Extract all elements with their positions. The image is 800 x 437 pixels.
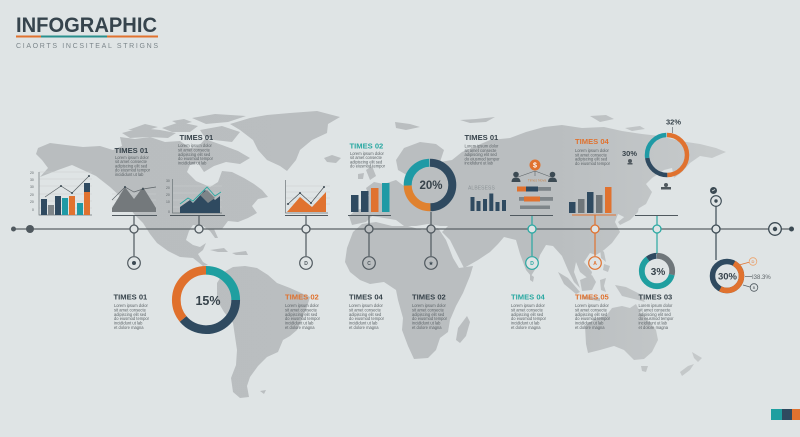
- text block: bottom Times 04: adipiscing elit sed: [349, 312, 382, 317]
- icon: small map marker: [661, 183, 671, 190]
- chart: mixed bars and line: 30: [30, 185, 34, 189]
- text block: bottom Times 01: incididunt ut lab: [114, 321, 143, 326]
- donut: 32%: [647, 135, 687, 175]
- marker D teal: D: [530, 261, 534, 267]
- chart: mixed bars and line: 20: [30, 200, 34, 204]
- text block: Times 01 A: Lorem ipsum dolor: [115, 155, 150, 160]
- text block: bottom Times 04: do eiusmod tempor: [349, 316, 385, 321]
- text block: bottom Times 04: [349, 292, 385, 330]
- text block: bottom Times 04: incididunt ut lab: [349, 321, 378, 326]
- chart: five bars orange: [569, 187, 616, 215]
- marker A orange: A: [593, 261, 597, 267]
- text block: bottom Times 04 teal: [511, 292, 547, 330]
- donut: 30%: [712, 262, 742, 290]
- text block: bottom Times 05 orange: Lorem ipsum dolor: [575, 303, 610, 308]
- title underline: [16, 36, 158, 38]
- donut label: 3%: 3%: [651, 267, 665, 278]
- text block: bottom Times 04: sit amet consecte: [349, 307, 382, 312]
- timeline: [11, 206, 794, 260]
- text block: bottom Times 04 teal: Lorem ipsum dolor: [511, 303, 546, 308]
- text block: bottom Times 04 teal: incididunt ut lab: [511, 321, 540, 326]
- text block: Times 01 B: do eiusmod tempor: [178, 156, 214, 161]
- text block: Times 01 B: TIMES 01: [180, 133, 214, 142]
- Borneo: [580, 275, 596, 291]
- Caribbean: [210, 248, 248, 255]
- North America: [36, 137, 268, 266]
- text block: bottom Times 03: do eiusmod tempor: [638, 316, 674, 321]
- text block: bottom Times 03: sit amet consecte: [638, 307, 671, 312]
- Sumatra and Java: [558, 272, 600, 301]
- text block: bottom Times 05 orange: et dolore magna: [575, 325, 605, 330]
- text block: bottom Times 02: et dolore magna: [412, 325, 442, 330]
- text block: bottom Times 05 orange: [575, 292, 611, 330]
- text block: bottom Times 02: TIMES 02: [412, 292, 446, 302]
- timeline axis: [13, 228, 791, 230]
- text block: bottom Times 01: sit amet consecte: [114, 307, 147, 312]
- text block: bottom Times 04 teal: sit amet consecte: [511, 307, 544, 312]
- text block: bottom Times 02: adipiscing elit sed: [412, 312, 445, 317]
- Australia: [585, 304, 658, 360]
- Britain and Scandinavia islands: [358, 117, 495, 180]
- text block: bottom Times 05 orange: adipiscing elit sed: [575, 312, 608, 317]
- label: 32%: 32%: [666, 118, 681, 126]
- icon: person left: [512, 172, 520, 182]
- text block: bottom Times 03: adipiscing elit sed: [638, 312, 672, 317]
- corner colour bar: [771, 409, 800, 420]
- text block: Times 01 A: incididunt ut lab: [115, 172, 144, 177]
- text block: Times 04 orange: sit amet consecte: [575, 152, 608, 157]
- text block: Times 01 A: sit amet consecte: [115, 159, 148, 164]
- text block: Times 01 A: TIMES 01: [114, 146, 149, 155]
- text block: bottom Times 02: incididunt ut lab: [412, 321, 441, 326]
- text block: Times 01 B: sit amet consecte: [178, 147, 211, 152]
- text block: bottom Times 04 teal: adipiscing elit sed: [511, 312, 544, 317]
- title: INFOGRAPHIC: [16, 14, 157, 37]
- Africa: [345, 222, 473, 359]
- chart: mixed bars and line: [30, 171, 92, 215]
- text block: Times 01 C: adipiscing elit sed: [464, 152, 498, 157]
- chart: mixed bars and line: 20: [30, 193, 34, 197]
- donut callouts: D: [752, 259, 755, 264]
- marker A orange: [589, 257, 601, 269]
- Arctic Russia islands: [590, 115, 645, 131]
- Iceland: [324, 155, 341, 163]
- chart: navy mountain: 30: [166, 179, 170, 183]
- text block: Times 02 teal: Lorem ipsum dolor: [350, 151, 385, 156]
- donut callouts: I38.3%: [752, 275, 771, 281]
- marker D teal: [526, 257, 538, 269]
- text block: bottom Times 01: TIMES 01: [114, 292, 148, 302]
- timeline stems: [134, 206, 716, 260]
- text block: bottom Times 02: sit amet consecte: [412, 307, 445, 312]
- text block: bottom Times 03: incididunt ut lab: [638, 321, 668, 326]
- text block: bottom Times 02 orange: et dolore magna: [285, 325, 315, 330]
- text block: bottom Times 02: do eiusmod tempor: [412, 316, 448, 321]
- text block: Times 01 C: [464, 133, 500, 166]
- text block: Times 01 C: do eiusmod tempor: [464, 156, 500, 161]
- text block: Times 04 orange: adipiscing elit sed: [575, 157, 608, 162]
- text block: Times 02 teal: adipiscing elit sed: [350, 159, 383, 164]
- text block: Times 04 orange: do eiusmod tempor: [575, 161, 611, 166]
- text block: bottom Times 03: TIMES 03: [638, 292, 672, 302]
- text block: Times 04 orange: Lorem ipsum dolor: [575, 148, 610, 153]
- text block: bottom Times 02 orange: adipiscing elit sed: [285, 312, 318, 317]
- lower markers: [128, 257, 601, 269]
- text block: Times 01 C: TIMES 01: [464, 133, 499, 142]
- subtitle: CIAORTS INCSITEAL STRIGNS: [16, 43, 158, 50]
- marker 1: [128, 257, 140, 269]
- text block: Times 01 B: [178, 133, 214, 166]
- text block: bottom Times 03: [638, 292, 674, 330]
- Greenland: [230, 111, 340, 171]
- text block: Times 04 orange: TIMES 04: [575, 137, 610, 146]
- upper right marker: [710, 187, 721, 206]
- chart: people and horizontal bars: Times Nova: [528, 178, 546, 182]
- marker C: [363, 257, 375, 269]
- text block: bottom Times 01: adipiscing elit sed: [114, 312, 147, 317]
- marker star: [425, 257, 437, 269]
- text block: bottom Times 04 teal: TIMES 04: [511, 292, 546, 302]
- timeline nodes: [130, 223, 781, 235]
- donut label: 30%: 30%: [718, 272, 738, 282]
- chart: orange area: [285, 180, 330, 216]
- text block: bottom Times 03: et dolore magna: [638, 325, 669, 330]
- South America: [217, 266, 310, 398]
- New Guinea: [615, 285, 645, 302]
- chart: navy mountain: 0: [168, 210, 170, 214]
- text block: bottom Times 05 orange: do eiusmod tempor: [575, 316, 611, 321]
- text block: bottom Times 02 orange: Lorem ipsum dolor: [285, 303, 320, 308]
- text block: bottom Times 02: [412, 292, 448, 330]
- Tasmania: [641, 366, 648, 372]
- chart: small navy bars: ALBESESS: [468, 186, 495, 192]
- text block: Times 02 teal: TIMES 02: [350, 142, 383, 150]
- text block: bottom Times 01: et dolore magna: [114, 325, 144, 330]
- text block: bottom Times 05 orange: sit amet consecte: [575, 307, 608, 312]
- New Zealand: [680, 352, 702, 376]
- text block: Times 01 C: sit amet consecte: [464, 148, 497, 153]
- label: 30% with icon: [622, 149, 637, 164]
- chart: navy mountain: 20: [166, 193, 170, 197]
- text block: bottom Times 04: TIMES 04: [349, 292, 384, 302]
- text block: Times 01 A: adipiscing elit sed: [115, 163, 148, 168]
- Sri Lanka: [530, 274, 534, 282]
- text block: Times 02 teal: sit amet consecte: [350, 155, 383, 160]
- Arctic islands: [122, 114, 246, 142]
- Madagascar: [456, 316, 470, 343]
- text block: Times 01 A: [114, 146, 151, 177]
- divider: teal node cap: [635, 214, 678, 216]
- text block: Times 01 A: do eiusmod tempor: [115, 168, 151, 173]
- text block: bottom Times 01: [114, 292, 150, 330]
- text block: Times 02 teal: [350, 142, 386, 169]
- chart: mixed bars and line: 30: [30, 178, 34, 182]
- donut: 3%: [642, 256, 672, 286]
- donut: 20%: [408, 163, 452, 207]
- text block: Times 01 B: Lorem ipsum dolor: [178, 143, 213, 148]
- Japan: [618, 183, 644, 225]
- text block: bottom Times 02 orange: sit amet consecte: [285, 307, 318, 312]
- Eurasia: [349, 125, 726, 288]
- donut: 15%: [176, 270, 236, 330]
- donut label: 15%: 15%: [195, 294, 221, 308]
- text block: bottom Times 01: Lorem ipsum dolor: [114, 303, 149, 308]
- text block: bottom Times 04: et dolore magna: [349, 325, 379, 330]
- chart: mixed bars and line: 20: [30, 171, 34, 175]
- label: 30% with icon: 30%: [622, 149, 637, 158]
- text block: bottom Times 04: Lorem ipsum dolor: [349, 303, 384, 308]
- text block: bottom Times 05 orange: TIMES 05: [575, 292, 610, 302]
- text block: bottom Times 04 teal: do eiusmod tempor: [511, 316, 547, 321]
- icon: person right: [548, 172, 557, 182]
- text block: Times 01 C: incididunt ut lab: [464, 161, 494, 166]
- text block: bottom Times 02 orange: [285, 292, 321, 330]
- text block: bottom Times 01: do eiusmod tempor: [114, 316, 150, 321]
- text block: Times 01 B: adipiscing elit sed: [178, 152, 211, 157]
- chart: people and horizontal bars: [510, 160, 557, 216]
- text block: bottom Times 02 orange: incididunt ut lab: [285, 321, 314, 326]
- Sakhalin: [636, 170, 640, 186]
- donut label: 20%: 20%: [419, 180, 443, 192]
- text block: bottom Times 02 orange: TIMES 02: [285, 292, 319, 302]
- chart: four bars: [348, 183, 391, 216]
- chart: navy mountain: 10: [166, 200, 170, 204]
- marker C: C: [367, 261, 371, 267]
- chart: navy mountain: 20: [166, 186, 170, 190]
- text block: bottom Times 02 orange: do eiusmod tempor: [285, 316, 321, 321]
- icon: dollar badge: $: [533, 162, 537, 170]
- chart: navy mountain: [166, 179, 225, 216]
- text block: Times 01 C: Lorem ipsum dolor: [464, 144, 499, 148]
- text block: bottom Times 04 teal: et dolore magna: [511, 325, 541, 330]
- text block: Times 04 orange: [575, 137, 611, 166]
- marker D: [300, 257, 312, 269]
- text block: bottom Times 05 orange: incididunt ut lab: [575, 321, 604, 326]
- world map: [36, 111, 726, 398]
- Philippines: [600, 248, 610, 272]
- text block: Times 02 teal: do eiusmod tempor: [350, 164, 386, 169]
- chart: grey mountain: [112, 186, 157, 216]
- Sulawesi: [600, 278, 606, 292]
- text block: bottom Times 03: Lorem ipsum dolor: [638, 303, 673, 308]
- chart: mixed bars and line: 0: [32, 208, 34, 212]
- marker star: ★: [429, 261, 434, 267]
- text block: Times 01 B: incididunt ut lab: [178, 161, 207, 166]
- chart: small navy bars: [468, 186, 506, 211]
- donut callouts: B: [753, 285, 756, 290]
- label: 32%: [666, 118, 681, 133]
- title block: [16, 14, 158, 50]
- donut callouts: [739, 258, 771, 291]
- text block: bottom Times 02: Lorem ipsum dolor: [412, 303, 447, 308]
- marker D: D: [304, 261, 308, 267]
